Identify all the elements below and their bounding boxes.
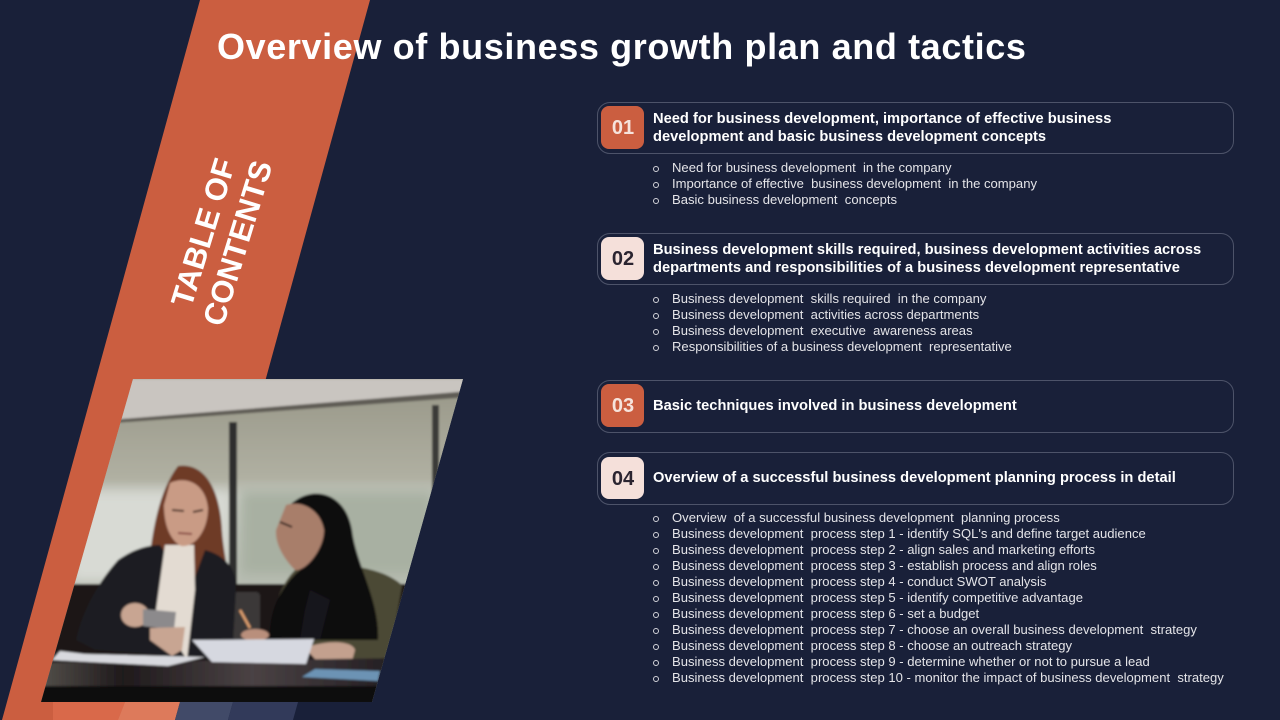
list: section 01: Basic business development concepts [672,192,897,207]
list: section 02: Responsibilities of a business development representative [672,339,1012,354]
heading 03: Basic techniques involved in business development [653,398,1017,414]
woman 2 hair [270,494,378,640]
mullions [229,422,237,587]
number badge 04: 04 [612,468,634,490]
paper right [192,639,314,664]
background artwork: band and photo [2,0,463,720]
panel: section 04 heading [597,452,1234,505]
list: section 04: Business development process step 9 - determine whether or not to pursue a lead [672,654,1150,669]
list: section 04: Business development process step 8 - choose an outreach strategy [672,638,1072,653]
list: section 04 [653,510,1224,685]
woman 1 face [164,480,208,546]
panel: section 01 heading [597,102,1234,154]
photo: two businesswomen at a table [30,379,470,709]
ceiling [120,379,470,421]
woman 2 face [276,504,324,570]
list: section 01: Need for business development in the company [672,160,952,175]
heading 02 [653,242,1201,276]
heading 01: development and basic business development concepts [653,129,1046,145]
number badge 02: 02 [612,248,634,270]
heading 04: Overview of a successful business development planning process in detail [653,470,1176,486]
number badge 03: 03 [612,395,634,417]
chair [232,592,260,640]
number badge 01 [601,106,644,149]
list: section 02: Business development skills required in the company [672,291,986,306]
list: section 04: Business development process step 3 - establish process and align roles [672,558,1097,573]
title: Overview of business growth plan and tactics [217,26,1026,67]
number badge 03 [601,384,644,427]
band label: table of contents: CONTENTS [196,156,279,330]
panel: section 03 heading [597,380,1234,433]
list: section 04: Business development process step 2 - align sales and marketing efforts [672,542,1095,557]
list: section 04: Business development process step 7 - choose an overall business development strategy [672,622,1197,637]
list: section 01: Importance of effective business development in the company [672,176,1037,191]
list: section 01 [653,160,1037,207]
list: section 02 [653,291,1012,354]
heading 02: Business development skills required, business development activities across [653,242,1201,258]
woman 2 jacket [277,566,403,660]
number badge 01: 01 [612,117,634,139]
list: section 02: Business development activities across departments [672,307,979,322]
window [60,397,470,590]
list: section 04: Overview of a successful business development planning process [672,510,1060,525]
woman 1 hand and phone [121,603,149,627]
list: section 04: Business development process step 5 - identify competitive advantage [672,590,1083,605]
pen [240,610,250,628]
woman 1 turtleneck [156,545,195,660]
band label: table of contents: TABLE OF [164,154,242,311]
table [46,657,384,688]
diagonal orange band [2,0,370,720]
blue paper [302,669,380,681]
wall below window [52,582,406,664]
list: section 04: Business development process step 1 - identify SQL's and define target audience [672,526,1146,541]
paper left [52,651,205,666]
heading 02: departments and responsibilities of a business development representative [653,260,1180,276]
heading 01: Need for business development, importance of effective business [653,111,1111,127]
list: section 04: Business development process step 4 - conduct SWOT analysis [672,574,1046,589]
heading 01 [653,111,1111,145]
bottom stripes [53,702,298,720]
woman 1 hair [150,464,227,578]
number badge 04 [601,457,644,499]
list: section 04: Business development process step 10 - monitor the impact of business development strategy [672,670,1224,685]
woman 2 hand [308,640,356,661]
number badge 02 [601,237,644,280]
panel: section 02 heading [597,233,1234,285]
list: section 04: Business development process step 6 - set a budget [672,606,979,621]
woman 1 blazer [76,545,236,660]
list: section 02: Business development executive awareness areas [672,323,973,338]
